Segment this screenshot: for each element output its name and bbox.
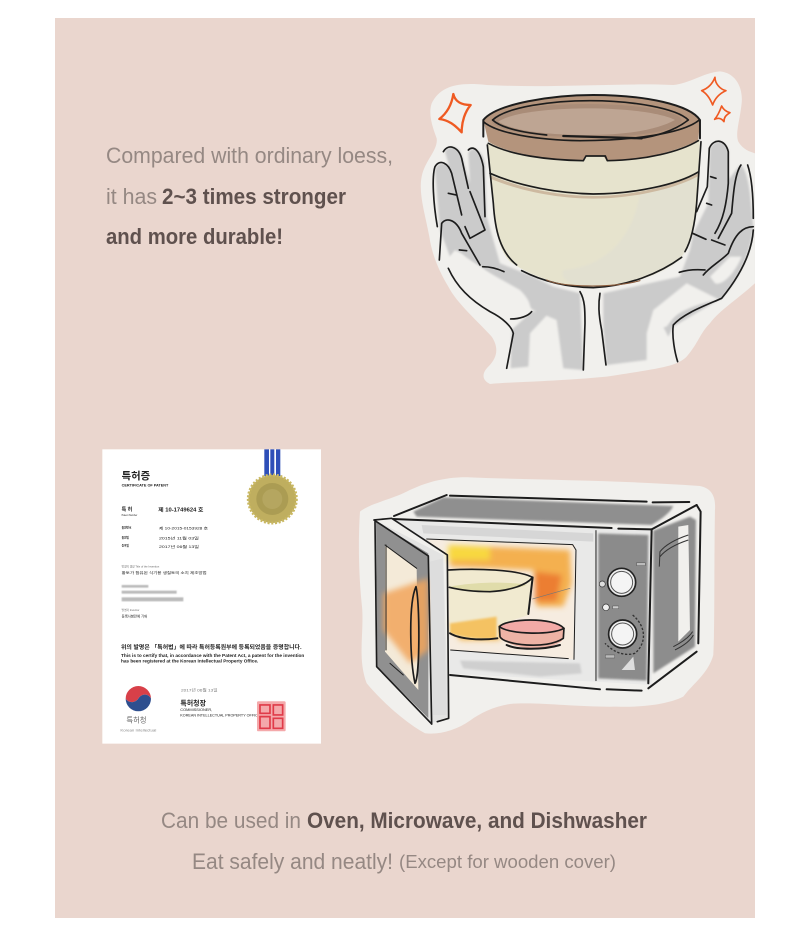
patent details: 제 10-1749624 호 [158, 506, 203, 514]
pink dish [499, 620, 564, 649]
patent details: 특 허 [122, 506, 133, 513]
date and commissioner: 특허청장 [180, 698, 207, 707]
microwave front [393, 518, 652, 685]
text block: strength claim: Compared with ordinary loess, [106, 143, 393, 168]
bowl outlines [483, 95, 701, 288]
grey watercolour hands [435, 142, 753, 370]
sparkles [439, 77, 730, 132]
safety note: Eat safely and neatly! [192, 849, 393, 874]
microwave outlines [393, 495, 701, 691]
bowl lid rim [483, 95, 700, 161]
control panel [598, 533, 648, 681]
patent details: 등록일 [122, 544, 130, 548]
certificate contents [120, 449, 305, 733]
date and commissioner [180, 686, 261, 718]
text block: strength claim: it has [106, 184, 157, 209]
right hand lines [599, 141, 753, 365]
patent details: 제 10-2015-0153928 호 [159, 525, 209, 530]
hand highlights [450, 252, 742, 328]
patent details: 2017년 06월 13일 [159, 544, 199, 549]
patent details: 발명의 명칭 Title of the Invention [122, 565, 160, 569]
inventor: 발명자 Inventor [122, 608, 139, 612]
front shading band [422, 525, 593, 542]
date and commissioner: 2017년 06월 13일 [181, 686, 218, 692]
text block: strength claim [106, 143, 393, 249]
cavity outlines [427, 539, 576, 659]
certificate paper [102, 449, 321, 744]
certificate title [122, 471, 169, 487]
cavity [427, 539, 575, 659]
certification statement [121, 643, 305, 663]
blurred owner block [122, 585, 183, 601]
gold seal [248, 475, 296, 523]
bold line: more durable: and more durable! [106, 224, 283, 249]
certificate subtitle: CERTIFICATE OF PATENT [122, 483, 169, 487]
blue ribbon [264, 449, 280, 476]
bowl shading [562, 177, 697, 286]
open door [374, 518, 449, 724]
text block: usage [161, 808, 647, 874]
patent details: 출원번호 [122, 525, 132, 529]
patent details: 2015년 11월 03일 [159, 535, 199, 540]
left hand lines [433, 147, 585, 370]
patent details: 출원일 [122, 535, 130, 539]
text block: strength claim: 2~3 times stronger [162, 184, 346, 209]
certification statement: This is to certify that, in accordance with the Patent Act, a patent for the invention [121, 653, 305, 658]
lower shadow [460, 661, 582, 677]
top panel [413, 497, 673, 525]
text block: usage: Can be used in [161, 808, 301, 833]
patent details: Patent Number [122, 514, 138, 517]
text block: usage: Oven, Microwave, and Dishwasher [307, 808, 647, 833]
KIPO logo [120, 686, 157, 733]
illustration: microwave with bowl [359, 477, 715, 734]
certificate title: 특허증 [122, 471, 151, 483]
orange glow [448, 545, 572, 640]
bowl band [490, 173, 698, 199]
bowl in cavity [448, 569, 533, 639]
inventor: 등록사항란에 기재 [122, 614, 147, 619]
certification statement: has been registered at the Korean Intellectual Property Office. [121, 658, 258, 663]
inventor [122, 608, 147, 619]
white paper cut-out [421, 71, 755, 384]
red stamp [257, 701, 286, 731]
KIPO logo: Korean Intellectual [120, 729, 157, 733]
logo wordmark: 특허청 [126, 716, 147, 725]
patent certificate [102, 449, 321, 744]
date and commissioner: KOREAN INTELLECTUAL PROPERTY OFFICE [180, 714, 261, 718]
patent details: 황토가 함유된 식기용 생칠토의 소지 제조방법 [122, 570, 207, 575]
patent details [122, 506, 209, 575]
date and commissioner: COMMISSIONER, [180, 708, 212, 712]
control panel knobs [599, 563, 645, 670]
text block: usage: (Except for wooden cover) [399, 852, 616, 872]
lid interior [492, 104, 682, 137]
certification statement: 위의 발명은 「특허법」에 따라 특허등록원부에 등록되었음을 증명합니다. [121, 643, 302, 651]
side panel [653, 517, 696, 673]
white paper cut-out [359, 477, 715, 734]
bowl body [487, 140, 700, 287]
illustration: hands holding bowl [421, 71, 755, 384]
